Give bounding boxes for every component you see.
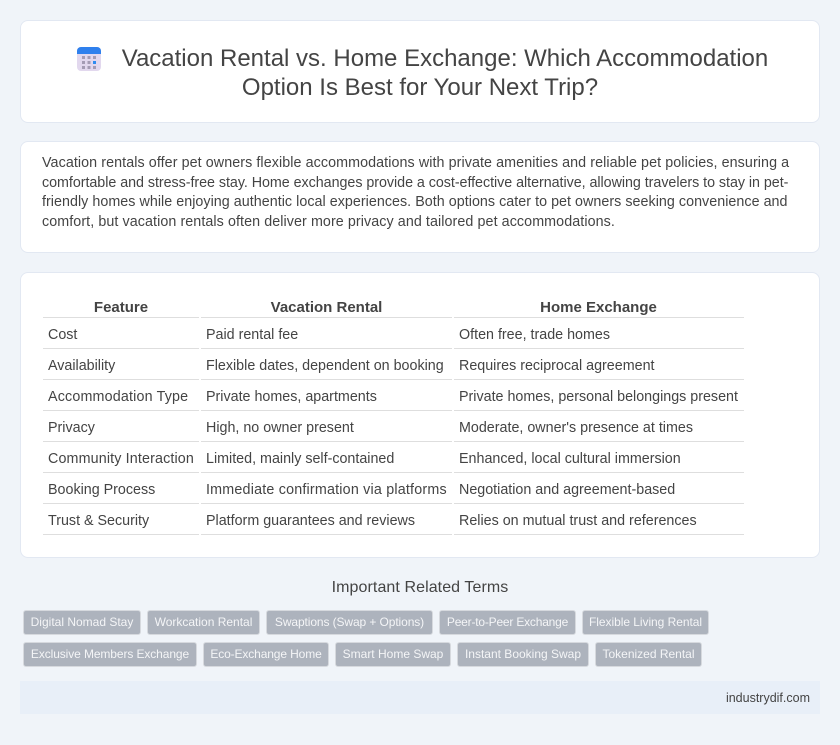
heading line 2: Option Is Best for Your Next Trip? (242, 74, 598, 101)
comparison table: Private homes, apartments (206, 389, 377, 405)
panel: title header (20, 20, 820, 123)
heading line 1: Vacation Rental vs. Home Exchange: Which Accommodation (122, 45, 768, 72)
comparison table: Home Exchange (540, 299, 657, 316)
related term tags: Tokenized Rental (602, 647, 695, 661)
related term tags: Digital Nomad Stay (31, 615, 133, 629)
related terms heading: Important Related Terms (332, 579, 508, 596)
comparison table: Cost (48, 327, 77, 343)
comparison table: Availability (48, 358, 115, 374)
related term tags: Swaptions (Swap + Options) (275, 615, 424, 629)
comparison table: Immediate confirmation via platforms (206, 482, 447, 498)
comparison table: Enhanced, local cultural immersion (459, 451, 681, 467)
footer source text: industrydif.com (726, 691, 810, 705)
related term tags: Flexible Living Rental (589, 615, 702, 629)
comparison table: Relies on mutual trust and references (459, 513, 697, 529)
comparison table: Booking Process (48, 482, 155, 498)
comparison table: Accommodation Type (48, 389, 188, 405)
comparison table: Vacation Rental (271, 299, 382, 316)
footer bar (20, 681, 820, 714)
related term tags (23, 610, 709, 667)
icon: calendar (77, 47, 101, 71)
intro text: Vacation rentals offer pet owners flexible accommodations with private amenities and reliable pet policies, ensuring a (42, 155, 789, 171)
related term tags: Exclusive Members Exchange (31, 647, 189, 661)
panel: comparison table (20, 272, 820, 558)
comparison table: Negotiation and agreement-based (459, 482, 675, 498)
comparison table: Limited, mainly self-contained (206, 451, 394, 467)
comparison table: Platform guarantees and reviews (206, 513, 415, 529)
comparison table: High, no owner present (206, 420, 354, 436)
comparison table: Flexible dates, dependent on booking (206, 358, 444, 374)
related term tags: Smart Home Swap (343, 647, 443, 661)
comparison table: Often free, trade homes (459, 327, 610, 343)
intro text: comfort, but vacation rentals often deliver more privacy and tailored pet accommodations. (42, 214, 615, 230)
intro text: friendly homes while enjoying authentic local experiences. Both options cater to pet owners seeking convenience and (42, 194, 788, 210)
intro text: comfortable and stress-free stay. Home exchanges provide a cost-effective alternative, allowing travelers to stay in pet- (42, 175, 788, 191)
panel: intro paragraph (20, 141, 820, 253)
intro text (42, 155, 790, 230)
comparison table: Privacy (48, 420, 95, 436)
comparison table: Moderate, owner's presence at times (459, 420, 693, 436)
related term tags: Workcation Rental (155, 615, 252, 629)
comparison table: Private homes, personal belongings present (459, 389, 738, 405)
comparison table (43, 299, 744, 535)
related term tags: Eco-Exchange Home (210, 647, 322, 661)
comparison table: Trust & Security (48, 513, 149, 529)
comparison table: Paid rental fee (206, 327, 298, 343)
comparison table: Feature (94, 299, 148, 316)
comparison table: Requires reciprocal agreement (459, 358, 654, 374)
related term tags: Peer-to-Peer Exchange (447, 615, 568, 629)
comparison table: Community Interaction (48, 451, 194, 467)
related term tags: Instant Booking Swap (465, 647, 581, 661)
